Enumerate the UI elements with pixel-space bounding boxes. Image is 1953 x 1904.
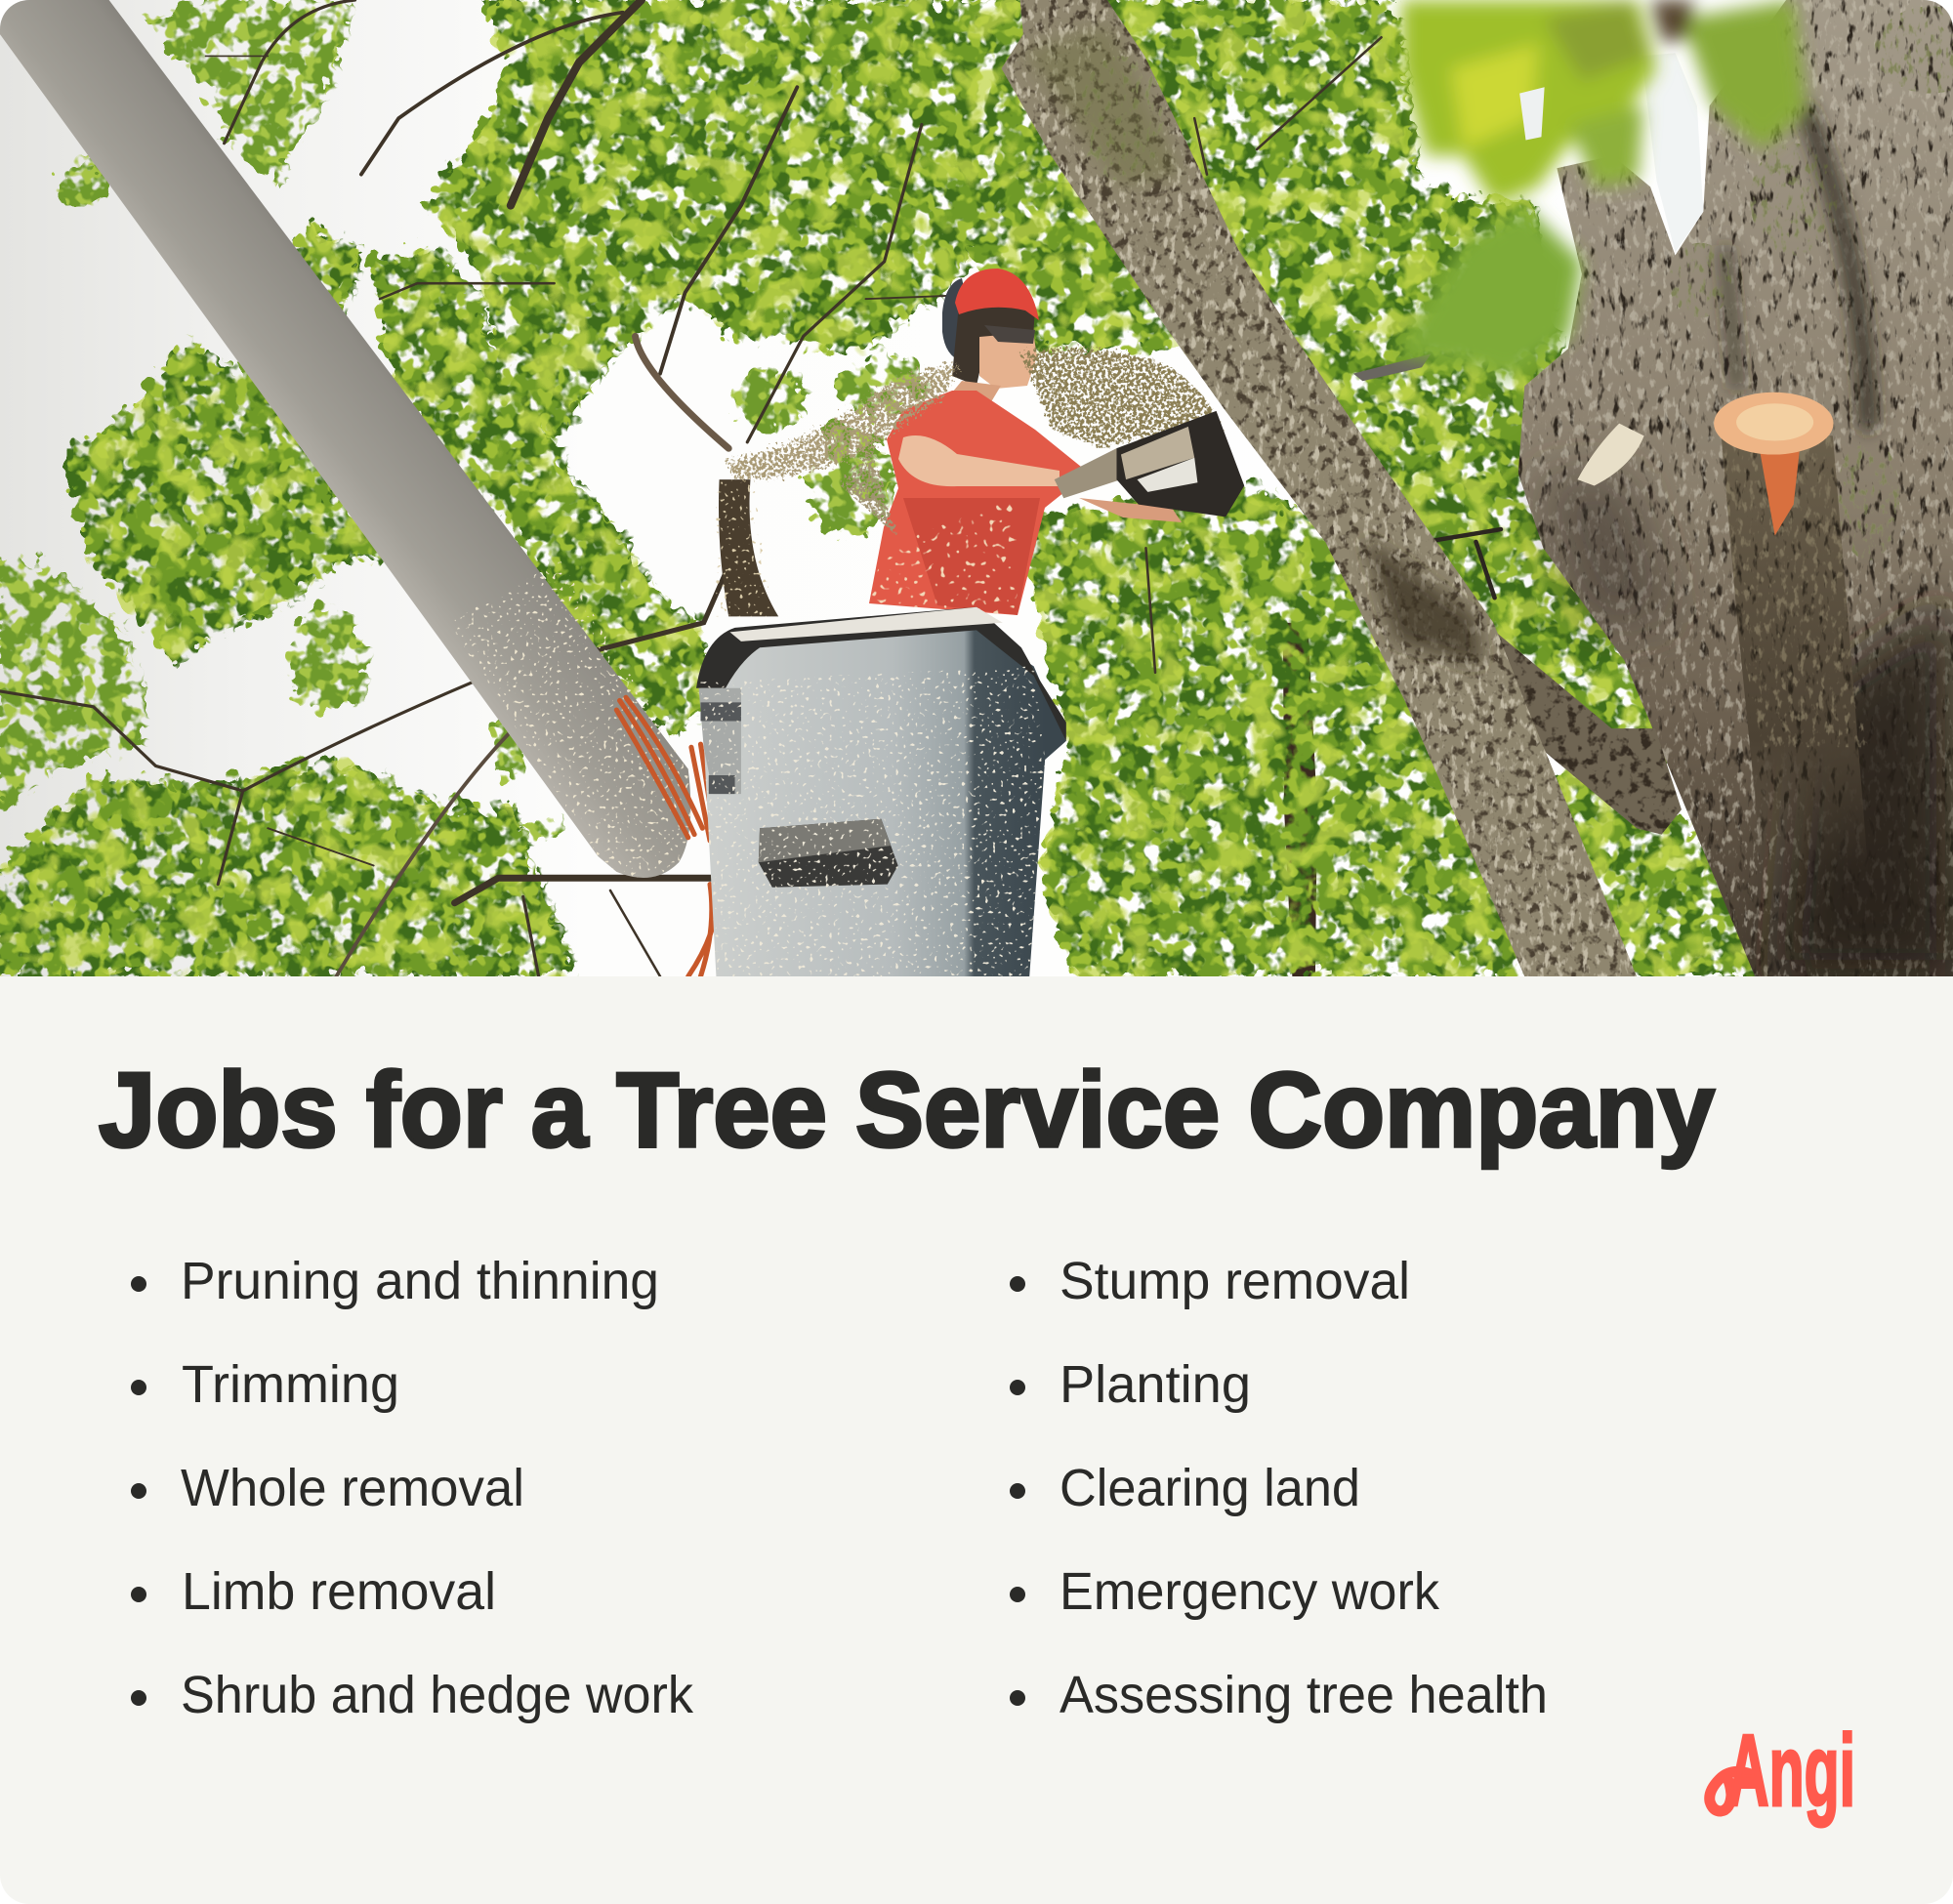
bullet: limb removal [131,1587,146,1602]
left list of jobs [131,1252,694,1724]
cut stump [1714,393,1868,872]
sawdust plume [726,348,1221,535]
sky background [0,0,1953,976]
bucket rim [696,607,1066,741]
bullet: clearing land [1010,1483,1025,1499]
side branch joining the trunk [1469,610,1682,835]
ear defenders [942,278,972,361]
forearm [898,435,1060,486]
red shirt [869,391,1086,615]
neck [952,381,1001,410]
bullet: whole removal [131,1483,146,1499]
sky gap among the blurred leaves [1519,87,1545,140]
item: trimming: Trimming [182,1355,399,1414]
photo: arborist cutting a tree from a bucket lift [0,0,1953,976]
second forearm [1079,498,1182,522]
title: Jobs for a Tree Service Company [99,1051,1715,1170]
arborist [869,269,1182,615]
bullet: shrub and hedge work [131,1690,146,1706]
logo: Angi [1710,1715,1855,1828]
speckled sawdust on the bucket [700,666,1045,976]
bullet: stump removal [1010,1276,1025,1292]
item: stump removal: Stump removal [1060,1252,1410,1310]
item: clearing land: Clearing land [1060,1459,1360,1517]
logo loop stroke [1710,1771,1758,1811]
fork shadows on trunk [1725,112,1868,424]
right list of jobs [1010,1252,1548,1724]
chainsaw [1055,353,1432,517]
helmet [955,269,1039,320]
bullet: planting [1010,1380,1025,1395]
bullet: pruning and thinning [131,1276,146,1292]
bullet: trimming [131,1380,146,1395]
bucket of the lift [696,607,1066,976]
large diagonal tree limb [1002,0,1637,976]
dark central tree limb behind leaves [1283,623,1317,976]
item: whole removal: Whole removal [181,1459,524,1517]
item: assessing tree health: Assessing tree health [1060,1666,1548,1724]
sunglasses [984,325,1035,344]
bullet: assessing tree health [1010,1690,1025,1706]
hair [952,305,1035,386]
orange cables [616,697,718,976]
foliage: canopy leaves [0,0,1775,976]
sawdust on the dark branch [716,479,772,616]
bucket body [700,629,1066,976]
content panel [98,1051,1855,1828]
item: pruning and thinning: Pruning and thinning [181,1252,659,1310]
item: emergency work: Emergency work [1060,1562,1440,1621]
item: planting: Planting [1060,1355,1251,1414]
mossy patches on the bark [1077,6,1953,560]
item: limb removal: Limb removal [182,1562,496,1621]
boom arm of the lift [0,0,690,878]
metal bracket [699,688,741,794]
light knot on the trunk [1577,424,1644,485]
dark branch covered with sawdust [719,479,778,616]
blurred foreground leaves [1395,0,1806,380]
sky gap near the top of the trunk [1641,53,1703,252]
main tree trunk with forks [1518,0,1953,976]
guide bar behind the limb [1353,353,1432,381]
black handle [759,819,898,888]
tree branches [0,0,1501,976]
face [979,332,1037,389]
item: shrub and hedge work: Shrub and hedge work [181,1666,694,1724]
bullet: emergency work [1010,1587,1025,1602]
logo wordmark: Angi [1727,1715,1855,1828]
